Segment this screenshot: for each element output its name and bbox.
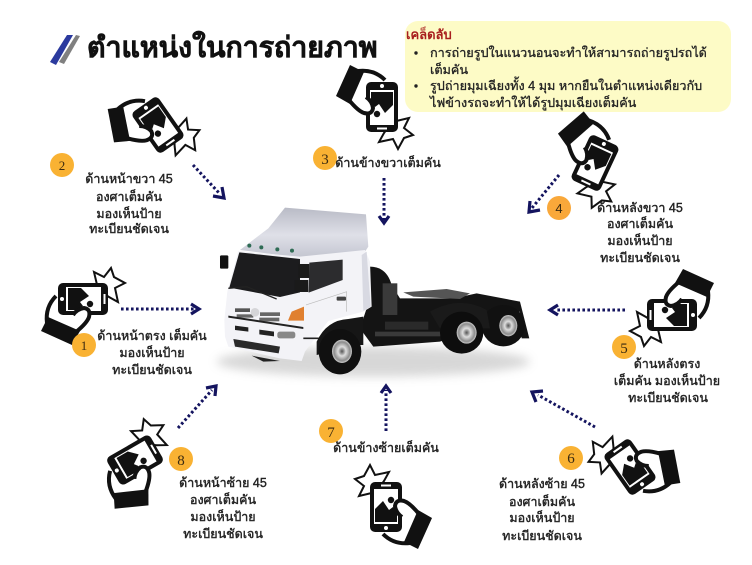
panel: tips xyxy=(405,21,731,112)
label 2: ด้านหน้าขวา 45 xyxy=(85,172,173,186)
badge 2 xyxy=(50,153,74,177)
label 8: ทะเบียนชัดเจน xyxy=(183,527,263,541)
label 1: ด้านหน้าตรง เต็มคัน xyxy=(97,328,207,343)
badge 2: 2 xyxy=(59,158,65,173)
badge 1 xyxy=(72,333,96,357)
panel: tips: เคล็ดลับ xyxy=(406,25,452,42)
label 3: ด้านข้างขวาเต็มคัน xyxy=(335,155,441,170)
badge 6 xyxy=(559,446,583,470)
badge 6: 6 xyxy=(567,451,575,467)
badge 7: 7 xyxy=(327,425,335,441)
arrow 6 xyxy=(532,391,595,427)
icon: camera position 1 xyxy=(41,268,125,345)
label 6 xyxy=(499,477,585,543)
label 5: ทะเบียนชัดเจน xyxy=(628,391,708,405)
label 2: ทะเบียนชัดเจน xyxy=(89,222,169,236)
arrow 5 xyxy=(550,305,625,315)
label 6: ทะเบียนชัดเจน xyxy=(502,529,582,543)
label 2: มองเห็นป้าย xyxy=(96,206,162,221)
label 4: มองเห็นป้าย xyxy=(607,233,673,248)
badge 4: 4 xyxy=(555,201,563,216)
label 8 xyxy=(179,476,267,541)
badge 7 xyxy=(319,419,343,443)
icon: camera position 8 xyxy=(83,412,194,521)
label 4: ด้านหลังขวา 45 xyxy=(597,201,683,215)
panel: tips: เต็มคัน xyxy=(430,62,468,77)
arrow 7 xyxy=(381,386,391,431)
label 2 xyxy=(85,172,173,236)
arrow 4 xyxy=(529,175,559,212)
label 1: ทะเบียนชัดเจน xyxy=(112,363,192,377)
icon: camera position 6 xyxy=(581,406,692,519)
title: ตำแหน่งในการถ่ายภาพ xyxy=(87,30,378,64)
label 5 xyxy=(614,357,720,405)
label 8: ด้านหน้าซ้าย 45 xyxy=(179,476,267,490)
badge 3 xyxy=(313,146,337,170)
label 4: องศาเต็มคัน xyxy=(607,216,674,231)
badge 8: 8 xyxy=(177,453,185,469)
icon: camera position 5 xyxy=(630,269,714,346)
label 8: มองเห็นป้าย xyxy=(190,509,256,524)
badge 3: 3 xyxy=(321,152,329,168)
panel: tips: การถ่ายรูปในแนวนอนจะทำให้สามารถถ่ายรูปรถได้ xyxy=(430,46,707,61)
label 1 xyxy=(97,328,207,377)
badge 5 xyxy=(612,335,636,359)
label 7: ด้านข้างซ้ายเต็มคัน xyxy=(333,440,439,455)
badge 1: 1 xyxy=(81,338,87,353)
arrow 3 xyxy=(379,178,389,223)
label 2: องศาเต็มคัน xyxy=(96,189,163,204)
icon: camera position 3 xyxy=(336,65,413,149)
label 4: ทะเบียนชัดเจน xyxy=(600,251,680,265)
label 8: องศาเต็มคัน xyxy=(190,492,257,507)
arrow 8 xyxy=(178,386,216,428)
label 6: ด้านหลังซ้าย 45 xyxy=(499,477,585,491)
arrow 1 xyxy=(121,304,199,314)
truck xyxy=(217,208,530,377)
label 6: มองเห็นป้าย xyxy=(509,510,575,525)
panel: tips: รูปถ่ายมุมเฉียงทั้ง 4 มุม หากยืนในตำแหน่งเดียวกับ xyxy=(430,76,702,94)
label 5: เต็มคัน มองเห็นป้าย xyxy=(614,373,720,388)
label 1: มองเห็นป้าย xyxy=(119,345,185,360)
badge 4 xyxy=(547,196,571,220)
icon: camera position 2 xyxy=(96,73,207,186)
arrow 2 xyxy=(193,165,224,198)
label 4 xyxy=(597,201,683,265)
icon: camera position 4 xyxy=(536,105,641,214)
badge 5: 5 xyxy=(620,341,628,357)
icon: camera position 7 xyxy=(355,465,432,549)
label 6: องศาเต็มคัน xyxy=(509,494,576,509)
panel: tips: ไฟข้างรถจะทำให้ได้รูปมุมเฉียงเต็มคัน xyxy=(429,95,637,111)
badge 8 xyxy=(169,447,193,471)
label 5: ด้านหลังตรง xyxy=(634,357,700,371)
